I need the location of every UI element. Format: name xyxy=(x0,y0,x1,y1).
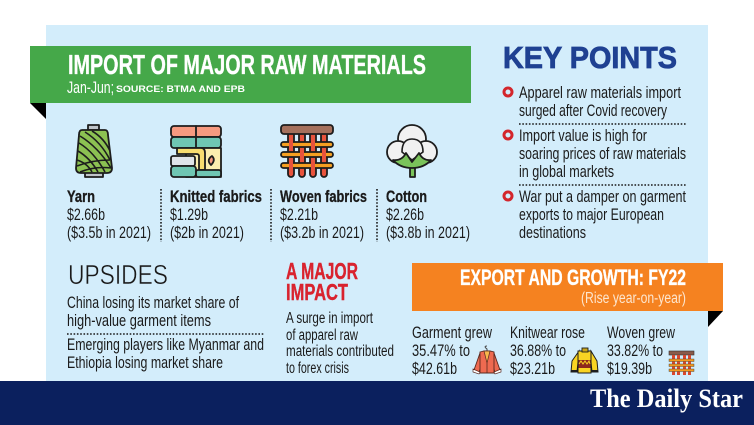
upside 2 xyxy=(67,336,264,372)
icon: sweater xyxy=(571,348,598,373)
upside 1: China losing its market share of xyxy=(67,294,239,312)
bullet 1: surged after Covid recovery xyxy=(519,102,668,120)
bullet 3 xyxy=(504,188,686,242)
stat: woven: Woven grew xyxy=(607,324,675,342)
banner subtitle: (Rise year-on-year) xyxy=(581,290,686,307)
stat: knitwear: $23.21b xyxy=(510,360,555,378)
body text: of apparel raw xyxy=(286,327,359,344)
heading xyxy=(286,258,358,305)
upside 1 xyxy=(67,294,239,330)
label: Yarn xyxy=(67,188,95,206)
bullet 1 xyxy=(504,84,681,120)
stat: garment: 35.47% to xyxy=(412,342,470,360)
bullet 2: in global markets xyxy=(519,163,614,181)
item: yarn xyxy=(67,125,151,242)
upsides section xyxy=(67,259,265,372)
icon: jacket xyxy=(473,346,501,374)
bullet 1: Apparel raw materials import xyxy=(519,84,681,102)
value: $2.21b xyxy=(280,206,318,224)
icon: cotton boll xyxy=(387,125,437,177)
subtitle and source xyxy=(67,78,246,97)
bullet 3: exports to major European xyxy=(519,206,664,224)
stat: garment: $42.61b xyxy=(412,360,457,378)
title: IMPORT OF MAJOR RAW MATERIALS xyxy=(68,49,426,80)
upside 2: Ethiopia losing market share xyxy=(67,354,223,372)
item: cotton xyxy=(386,125,470,242)
light blue background panel xyxy=(46,25,708,381)
stat: knitwear: 36.88% to xyxy=(510,342,566,360)
icon: yarn cone xyxy=(76,125,112,177)
subtitle and source: SOURCE: BTMA AND EPB xyxy=(116,84,246,94)
stat: garment xyxy=(412,324,501,378)
stat: woven: $19.39b xyxy=(607,360,652,378)
value: $2.26b xyxy=(386,206,424,224)
stat: garment: Garment grew xyxy=(412,324,492,342)
comparison: ($3.2b in 2021) xyxy=(280,224,364,242)
heading: UPSIDES xyxy=(68,259,168,290)
value: $1.29b xyxy=(170,206,208,224)
a major impact section xyxy=(286,258,394,377)
label: Knitted fabrics xyxy=(170,188,262,206)
heading: IMPACT xyxy=(286,279,348,305)
stat: woven: 33.82% to xyxy=(607,342,663,360)
label: Cotton xyxy=(386,188,427,206)
body text: to forex crisis xyxy=(286,360,349,377)
footer band xyxy=(0,381,754,425)
bullet 2: Import value is high for xyxy=(519,127,647,145)
stat: woven xyxy=(607,324,694,378)
key points panel xyxy=(503,40,687,242)
body text: A surge in import xyxy=(286,310,374,327)
logo: The Daily Star: The Daily Star xyxy=(590,384,743,413)
bullet 3: War put a damper on garment xyxy=(519,188,686,206)
icon: folded fabrics xyxy=(171,126,221,177)
value: $2.66b xyxy=(67,206,105,224)
upside 1: high-value garment items xyxy=(67,312,211,330)
bullet 2 xyxy=(504,127,686,181)
orange export banner xyxy=(412,263,723,327)
bullet 3: destinations xyxy=(519,224,586,242)
comparison: ($3.8b in 2021) xyxy=(386,224,470,242)
subtitle and source: Jan-Jun; xyxy=(67,78,114,97)
item: woven fabrics xyxy=(280,125,367,242)
label: Woven fabrics xyxy=(280,188,367,206)
stat: knitwear xyxy=(510,324,598,378)
stat: knitwear: Knitwear rose xyxy=(510,324,585,342)
heading: A MAJOR xyxy=(286,258,358,284)
comparison: ($2b in 2021) xyxy=(170,224,244,242)
icon: small woven cloth xyxy=(669,351,694,375)
item: knitted fabrics xyxy=(170,126,262,242)
body text xyxy=(286,310,394,377)
upside 2: Emerging players like Myanmar and xyxy=(67,336,264,354)
green title banner xyxy=(30,46,471,119)
comparison: ($3.5b in 2021) xyxy=(67,224,151,242)
heading: KEY POINTS xyxy=(503,40,677,75)
icon: woven cloth xyxy=(281,125,333,177)
body text: materials contributed xyxy=(286,343,394,360)
bullet 2: soaring prices of raw materials xyxy=(519,145,686,163)
